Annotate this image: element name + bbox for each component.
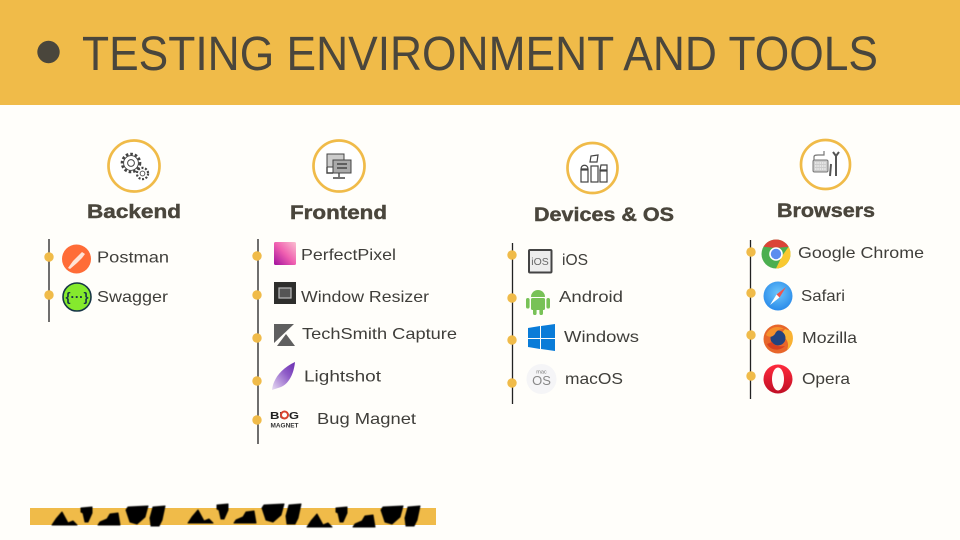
item: Window Resizer — [274, 282, 430, 306]
footer band — [30, 504, 436, 527]
icon: keyboard and tools — [801, 140, 850, 189]
item: Lightshot: Lightshot — [304, 368, 382, 386]
timeline: frontend — [252, 239, 262, 444]
panel: devices and os — [507, 143, 674, 404]
timeline: devices — [507, 243, 517, 404]
item: Bug Magnet: Bug Magnet — [317, 411, 417, 428]
item: iOS: iOS — [562, 252, 588, 269]
item: Window Resizer: Window Resizer — [301, 289, 430, 306]
item: Bug Magnet — [270, 410, 417, 430]
item: Safari: Safari — [801, 288, 845, 305]
item: Swagger: {···} — [65, 290, 89, 304]
item: Safari — [764, 282, 845, 310]
heading: devices and os: Devices & OS — [534, 204, 674, 226]
redaction blobs — [52, 504, 420, 527]
item: Windows: Windows — [564, 329, 639, 346]
panel: backend — [44, 140, 181, 322]
header banner — [0, 0, 960, 105]
item: Lightshot — [272, 362, 382, 390]
item: macOS: macOS — [565, 371, 623, 388]
timeline: backend — [44, 239, 54, 322]
item: TechSmith Capture — [274, 324, 457, 346]
item: iOS — [529, 250, 588, 272]
item: macOS: mac — [536, 370, 547, 376]
item: Google Chrome: Google Chrome — [798, 245, 924, 262]
heading: browsers: Browsers — [777, 200, 875, 222]
timeline: browsers — [746, 240, 756, 399]
title: TESTING ENVIRONMENT AND TOOLS — [82, 28, 878, 81]
title bullet — [37, 41, 60, 63]
item: Android: Android — [559, 289, 623, 306]
item: Google Chrome — [762, 240, 924, 268]
icon: gears — [108, 140, 160, 192]
heading: backend: Backend — [87, 201, 181, 223]
icon: devices — [568, 143, 618, 193]
item: PerfectPixel — [274, 242, 396, 265]
item: macOS: OS — [532, 373, 551, 388]
icon: monitor windows — [314, 140, 364, 192]
item: PerfectPixel: PerfectPixel — [301, 247, 396, 264]
item: Swagger: Swagger — [97, 289, 169, 306]
item: Mozilla: Mozilla — [802, 330, 857, 347]
item: Bug Magnet: BUG — [270, 410, 299, 422]
item: Opera — [764, 364, 850, 394]
item: TechSmith Capture: TechSmith Capture — [302, 326, 457, 343]
item: Postman: Postman — [97, 250, 169, 266]
item: Windows — [528, 324, 639, 351]
item: Android — [526, 289, 623, 315]
item: Bug Magnet: MAGNET — [270, 422, 299, 430]
item: Swagger — [63, 283, 169, 311]
item: Opera: Opera — [802, 371, 850, 388]
item: Mozilla — [764, 324, 857, 354]
item: iOS: iOS — [531, 256, 549, 268]
item: macOS — [526, 364, 623, 394]
item: Postman — [62, 244, 169, 274]
heading: frontend: Frontend — [290, 202, 387, 224]
panel: frontend — [252, 140, 457, 444]
panel: browsers — [746, 140, 924, 399]
